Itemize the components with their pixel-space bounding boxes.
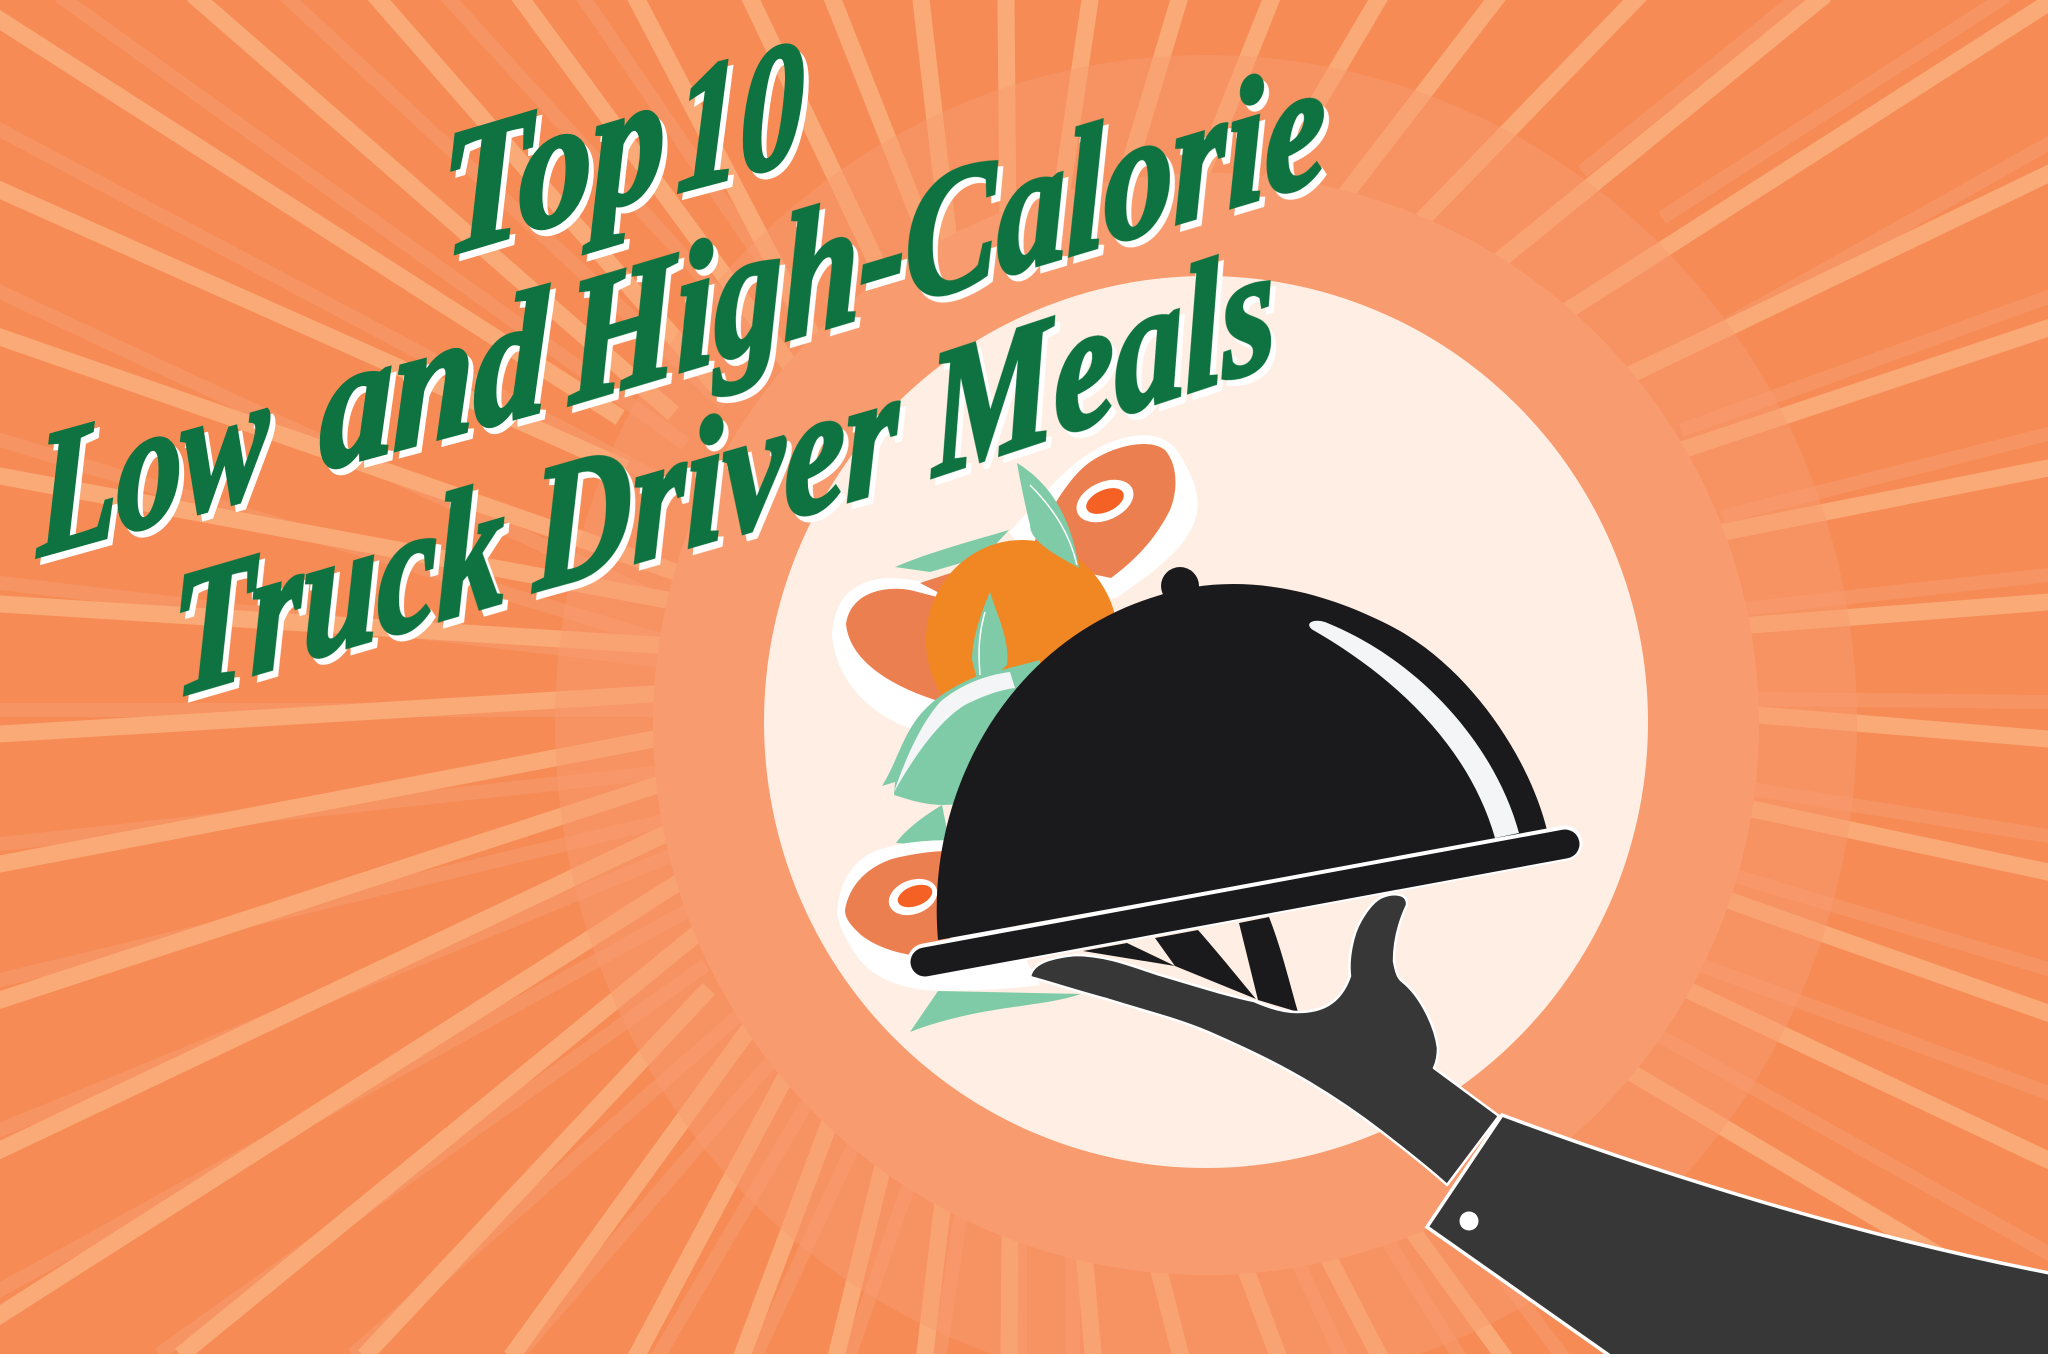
- leaf: top strip: [895, 530, 1009, 572]
- serving tray: [925, 843, 1565, 962]
- title word: and: and: [320, 250, 549, 509]
- food illustration behind cloche: [832, 435, 1198, 1032]
- cream plate circle: [764, 276, 1648, 1168]
- waiter hand: [1030, 894, 1499, 1185]
- leaf: on orange: [972, 592, 1007, 690]
- title word: Top: Top: [440, 31, 667, 295]
- title word: Truck: Truck: [171, 442, 506, 736]
- middle ring: [653, 173, 1759, 1275]
- steak: left: [832, 570, 990, 735]
- cloche highlight: [1309, 621, 1519, 838]
- leaf: bottom: [910, 991, 1081, 1032]
- title word: Meals: Meals: [923, 204, 1280, 515]
- title word: Driver: Driver: [530, 327, 901, 630]
- steak: bottom left: [837, 840, 1040, 991]
- outer translucent ring: [555, 55, 1857, 1358]
- leaf: on top of steak: [1017, 463, 1079, 568]
- cloche knob: [1161, 567, 1199, 605]
- steak: top right: [1009, 435, 1198, 600]
- cloche dome: [937, 567, 1547, 940]
- leaves: left greens: [882, 660, 1040, 845]
- cloche supports under tray: [1083, 917, 1298, 1012]
- title word: Low: Low: [35, 333, 270, 595]
- sleeve button: [1460, 1212, 1478, 1230]
- title: [35, 0, 1328, 736]
- orange fruit: [926, 540, 1118, 740]
- waiter sleeve: [1427, 1115, 2048, 1358]
